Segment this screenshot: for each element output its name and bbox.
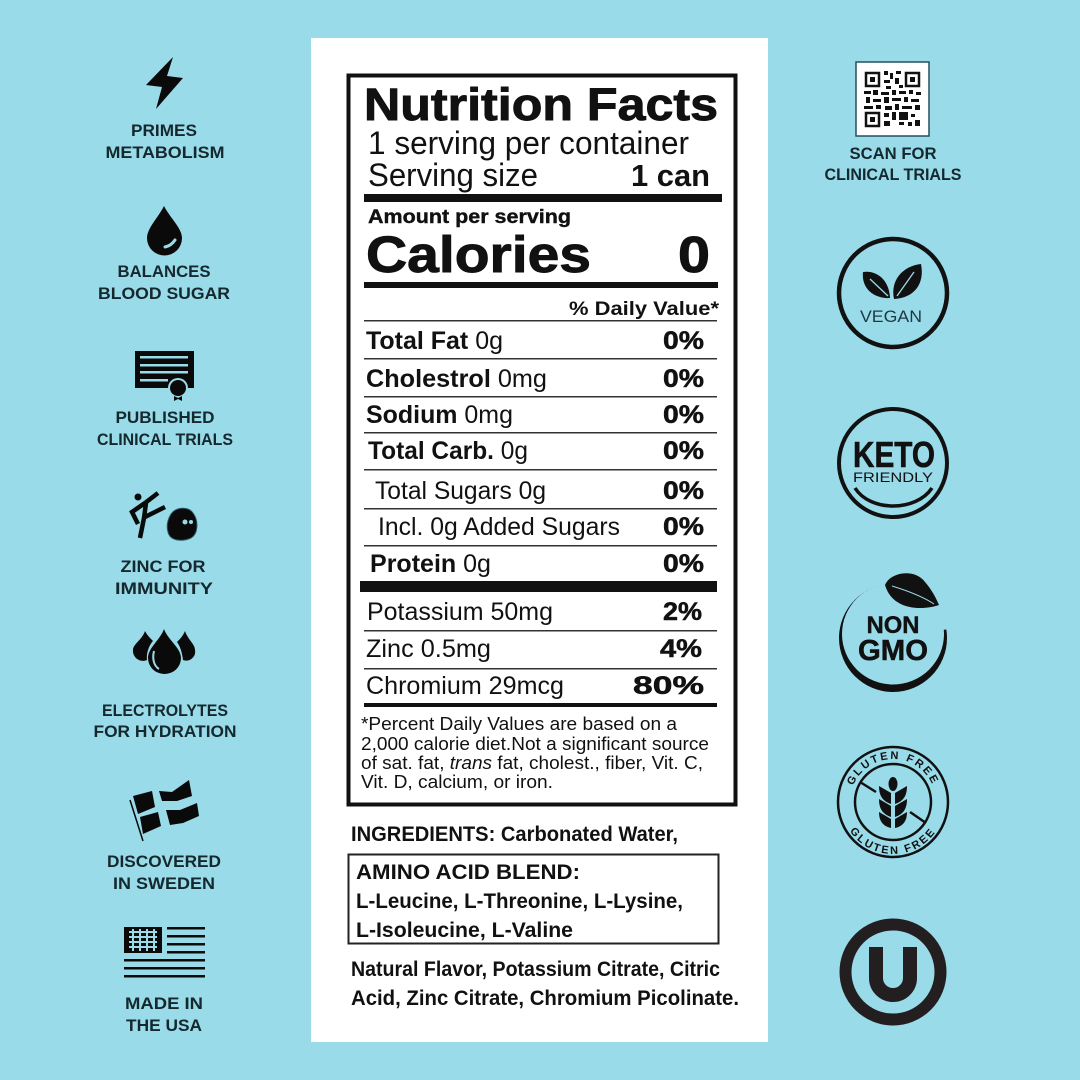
caption: electrolytes for hydration [94,702,236,741]
footnote: 2,000 calorie diet.Not a significant source [361,733,709,754]
footnote: of sat. fat, trans fat, cholest., fiber, Vit. C, [361,752,703,773]
caption: scan for clinical trials [824,145,962,184]
icon: american flag [124,927,205,978]
amino acid blend box: L-Isoleucine, L-Valine [356,918,573,942]
serving information: Serving size [368,157,538,193]
caption: zinc for immunity: IMMUNITY [115,580,213,598]
nutrient rows: Sodium 0mg [366,401,513,429]
caption: primes metabolism: PRIMES [131,122,197,140]
calories: Calories [366,226,591,283]
serving information [368,125,710,193]
footnote: Vit. D, calcium, or iron. [361,771,553,792]
amino acid blend box: AMINO ACID BLEND: [356,860,580,884]
badge: keto friendly [839,409,947,517]
icon: swedish flag [130,780,199,841]
caption: published clinical trials: CLINICAL TRIALS [97,431,233,449]
nutrient rows: 0% [663,327,704,355]
icon: qr code [856,62,929,136]
nutrient rows: 0% [663,513,704,541]
caption: scan for clinical trials: CLINICAL TRIALS [824,166,962,184]
icon: lightning bolt [146,57,183,109]
nutrient rows: Protein 0g [370,550,491,578]
badge: vegan [839,239,947,347]
caption: balances blood sugar: BLOOD SUGAR [98,285,230,303]
nutrient rows: 2% [663,598,702,626]
ingredients: Acid, Zinc Citrate, Chromium Picolinate. [351,986,739,1010]
heading: nutrition facts: Nutrition Facts [364,79,718,130]
nutrient rows: Potassium 50mg [367,598,553,626]
badge: non gmo: NON [866,612,920,639]
nutrient rows [360,320,717,707]
badge: keto friendly: FRIENDLY [853,469,934,485]
ingredients [348,822,739,1010]
nutrient rows: 0% [663,550,704,578]
caption: made in the usa [125,995,203,1035]
badge: vegan: VEGAN [860,307,922,326]
caption: discovered in sweden: IN SWEDEN [113,875,215,893]
nutrient rows: 80% [633,672,704,700]
icon: blood drop [147,206,182,256]
nutrient rows: Incl. 0g Added Sugars [378,513,620,541]
panel: nutrition facts [348,76,736,804]
nutrient rows: Chromium 29mcg [366,672,564,700]
nutrient rows: 0% [663,437,704,465]
caption: electrolytes for hydration: ELECTROLYTES [102,702,228,720]
serving information: 1 can [631,158,710,193]
footnote: *Percent Daily Values are based on a [361,713,678,734]
ingredients: Natural Flavor, Potassium Citrate, Citric [351,957,720,981]
calories: 0 [678,226,710,283]
icon: kicking figure and germ [132,493,197,540]
caption: published clinical trials [97,409,233,449]
nutrient rows: 0% [663,365,704,393]
footnote [361,713,709,792]
nutrient rows: 0% [663,477,704,505]
caption: scan for clinical trials: SCAN FOR [850,145,937,163]
caption: primes metabolism: METABOLISM [106,144,224,162]
caption: zinc for immunity: ZINC FOR [120,558,206,576]
nutrient rows: Cholestrol 0mg [366,365,547,393]
caption: discovered in sweden: DISCOVERED [107,853,221,871]
badge: non gmo: GMO [858,635,928,667]
amino acid blend box [348,854,718,944]
caption: balances blood sugar [98,263,230,303]
badge: non gmo [839,570,955,692]
caption: electrolytes for hydration: FOR HYDRATION [94,723,236,741]
nutrient rows: 0% [663,401,704,429]
calories [366,206,710,283]
caption: zinc for immunity [115,558,213,598]
badge: orthodox union kosher [846,924,940,1020]
amino acid blend box: L-Leucine, L-Threonine, L-Lysine, [356,889,683,913]
caption: discovered in sweden [107,853,221,893]
caption: balances blood sugar: BALANCES [118,263,210,281]
caption: made in the usa: THE USA [126,1017,202,1035]
badge: gluten free: GLUTEN FREE [851,828,935,854]
nutrient rows: Total Sugars 0g [375,477,546,505]
calories: Amount per serving [368,206,571,228]
caption: primes metabolism [106,122,224,162]
badge: keto friendly: KETO [853,434,935,475]
nutrient rows: Total Carb. 0g [368,437,528,465]
panel: white label background [311,38,768,1042]
nutrient rows: Zinc 0.5mg [366,635,491,663]
daily value header: % Daily Value* [569,299,720,320]
ingredients: INGREDIENTS: Carbonated Water, [351,822,678,846]
icon: certificate [135,351,194,401]
badge: gluten free: GLUTEN FREE [848,751,938,784]
icon: electrolyte drops [133,629,195,674]
caption: published clinical trials: PUBLISHED [116,409,215,427]
badge: gluten free [836,746,950,858]
caption: made in the usa: MADE IN [125,995,203,1013]
nutrient rows: Total Fat 0g [366,327,503,355]
nutrient rows: 4% [660,635,702,663]
serving information: 1 serving per container [368,125,689,161]
